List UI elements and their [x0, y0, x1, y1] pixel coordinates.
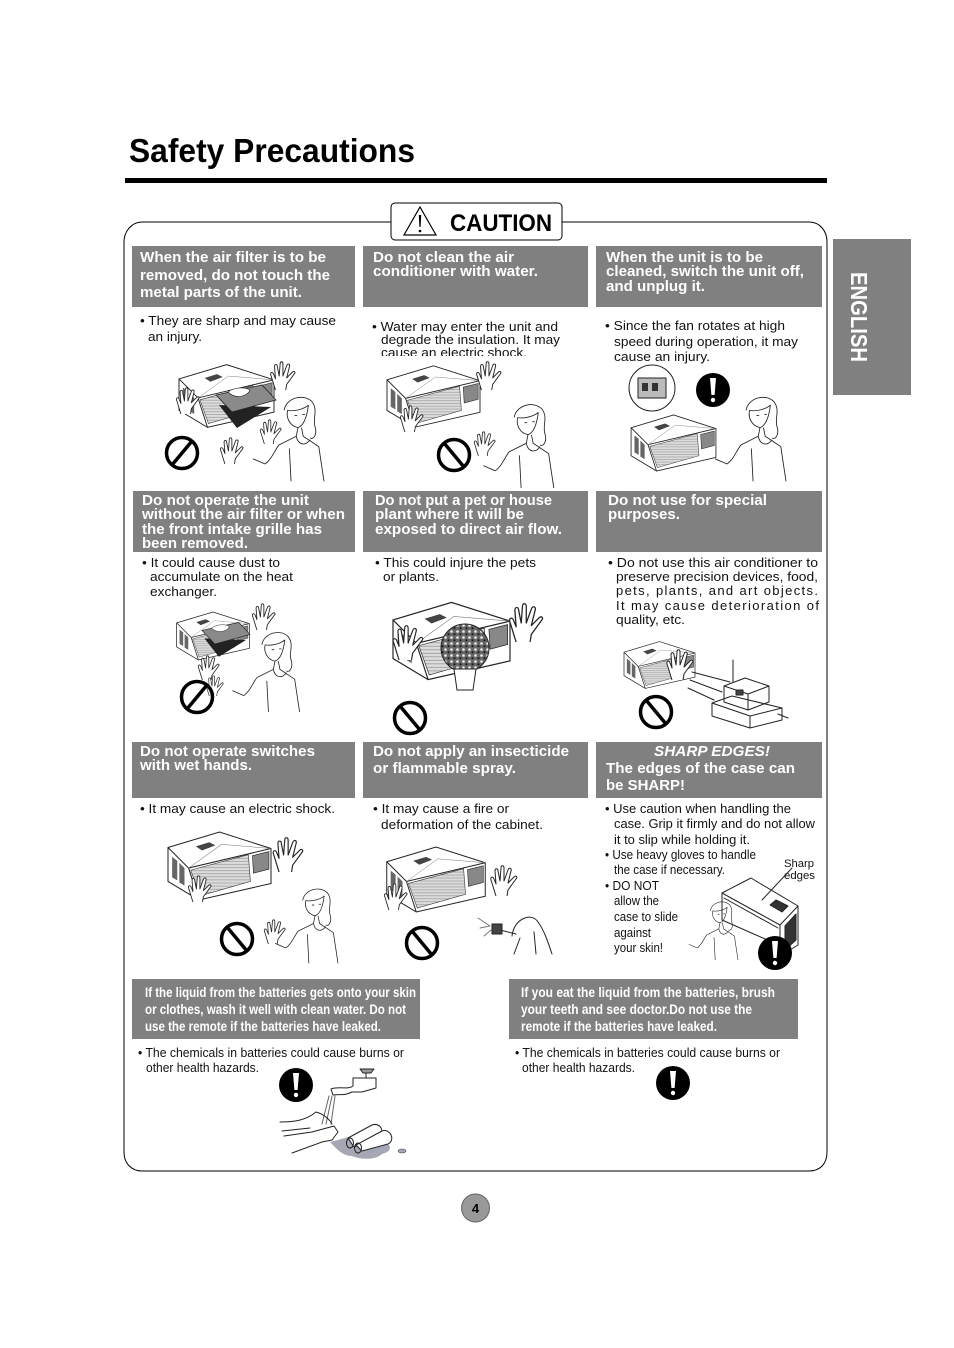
icon: mandatory	[279, 1068, 313, 1102]
text: handling: case to slide	[614, 909, 678, 924]
text: handling: • Use caution when handling the	[605, 801, 791, 816]
page number: 4	[472, 1201, 480, 1216]
text: preservation: It may cause deterioration of	[616, 598, 819, 613]
icon: prohibited	[182, 682, 212, 712]
heading: sharp edges: The edges of the case can	[606, 761, 795, 777]
title rule	[125, 178, 827, 183]
text: fan: speed during operation, it may	[614, 334, 799, 349]
heading: batteries eaten: remote if the batteries have leaked.	[521, 1018, 717, 1034]
text: fire	[373, 801, 543, 832]
language tab	[833, 239, 911, 395]
heading: do not clean with water: Do not clean the air	[373, 250, 514, 266]
heading: batteries eaten	[509, 979, 798, 1039]
heading: no operation without filter: been removed.	[142, 536, 248, 552]
text: pets: or plants.	[383, 569, 439, 584]
heading: no operation without filter: without the air filter or when	[141, 507, 345, 523]
icon: prohibited	[394, 702, 426, 734]
text: pets: • This could injure the pets	[375, 555, 537, 570]
text: handling: your skin!	[614, 940, 663, 955]
text: handling: case. Grip it firmly and do not allow	[614, 816, 816, 831]
text: chemicals right: • The chemicals in batteries could cause burns or	[515, 1045, 781, 1060]
heading: do not clean with water	[363, 246, 588, 307]
heading: special purposes: purposes.	[608, 507, 680, 523]
person with spray	[478, 917, 552, 954]
text: preservation: preserve precision devices, food,	[616, 569, 818, 584]
heading: batteries eaten: your teeth and see doctor.Do not use the	[521, 1001, 752, 1017]
icon: mandatory	[656, 1066, 690, 1100]
text: sharp parts: • They are sharp and may cause	[140, 313, 336, 328]
text: handling: allow the	[614, 893, 659, 908]
icon: prohibited	[406, 928, 438, 958]
illustration: handling the case	[689, 868, 798, 970]
batteries	[346, 1124, 392, 1153]
text: fire: • It may cause a fire or	[373, 801, 510, 816]
heading: switch off and unplug: cleaned, switch the unit off,	[606, 264, 804, 280]
text: handling: against	[614, 925, 651, 940]
heading: no operation without filter: the front intake grille has	[142, 522, 322, 538]
text: fan: cause an injury.	[614, 349, 710, 364]
caution badge: CAUTION	[450, 210, 552, 237]
text: fire: deformation of the cabinet.	[381, 817, 543, 832]
text: preservation	[608, 555, 819, 627]
illustration: filter removed	[177, 604, 300, 712]
heading: no operation without filter	[133, 491, 355, 552]
icon: outlet callout	[629, 365, 675, 411]
heading: switch off and unplug: and unplug it.	[606, 279, 705, 295]
label: sharp edges: edges	[784, 870, 816, 882]
text: fan	[605, 318, 799, 364]
text: chemicals right: other health hazards.	[522, 1060, 635, 1075]
heading: sharp edges: SHARP EDGES!	[654, 744, 770, 760]
text: electric shock: • It may cause an electric shock.	[140, 801, 335, 816]
heading: air filter metal parts: When the air filter is to be	[140, 250, 326, 266]
heading: insecticide	[363, 742, 588, 798]
heading: special purposes	[596, 491, 822, 552]
panel frame	[124, 222, 827, 1171]
heading: wet hands: with wet hands.	[139, 758, 252, 774]
heading: wet hands	[132, 742, 355, 798]
hands	[280, 1112, 338, 1153]
illustration: removing air filter	[166, 362, 324, 481]
text: sharp parts	[140, 313, 336, 344]
text: water	[372, 319, 561, 362]
case	[722, 868, 798, 950]
heading: batteries on skin: If the liquid from the batteries gets onto your skin	[145, 984, 416, 1000]
text: preservation: • Do not use this air conditioner to	[608, 555, 818, 570]
text: water: degrade the insulation. It may	[381, 332, 561, 347]
heading: special purposes: Do not use for special	[608, 493, 767, 509]
heading: batteries on skin	[132, 979, 420, 1039]
text: handling: • Use heavy gloves to handle	[605, 847, 756, 862]
illustration: precision devices	[624, 642, 788, 728]
text: chemicals right	[515, 1045, 781, 1075]
page number	[462, 1194, 490, 1222]
icon: prohibited	[222, 924, 252, 954]
icon: prohibited	[438, 440, 470, 470]
icon: mandatory	[758, 936, 792, 970]
faucet	[322, 1069, 376, 1124]
text: water: cause an electric shock.	[381, 345, 527, 360]
text: handling: • DO NOT	[605, 878, 659, 893]
label: sharp edges	[784, 858, 816, 882]
icon: prohibited	[166, 438, 198, 468]
illustration: unplug	[629, 365, 786, 481]
illustration: wet hands	[168, 832, 338, 963]
heading: air filter metal parts: removed, do not touch the	[140, 268, 330, 284]
text: chemicals left: • The chemicals in batteries could cause burns or	[138, 1045, 405, 1060]
icon: mandatory	[696, 373, 730, 407]
text: handling: the case if necessary.	[614, 862, 725, 877]
heading: pets and plants: exposed to direct air flow.	[375, 522, 562, 538]
text: sharp parts: an injury.	[148, 329, 202, 344]
text: preservation: pets, plants, and art objects.	[616, 583, 818, 598]
heading: batteries on skin: use the remote if the batteries have leaked.	[145, 1018, 381, 1034]
text: water: • Water may enter the unit and	[372, 319, 558, 334]
heading: pets and plants: plant where it will be	[375, 507, 524, 523]
text: dust	[142, 555, 293, 599]
caution badge	[391, 203, 562, 240]
heading: sharp edges: be SHARP!	[606, 778, 685, 794]
heading: wet hands: Do not operate switches	[140, 744, 315, 760]
text: dust: exchanger.	[150, 584, 217, 599]
text: dust: accumulate on the heat	[150, 569, 293, 584]
heading: pets and plants	[363, 491, 588, 552]
text: fan: • Since the fan rotates at high	[605, 318, 785, 333]
illustration: washing batteries	[279, 1068, 406, 1159]
heading: batteries eaten: If you eat the liquid from the batteries, brush	[521, 984, 775, 1000]
heading: do not clean with water: conditioner with water.	[373, 264, 538, 280]
text: dust: • It could cause dust to	[142, 555, 280, 570]
spill	[330, 1135, 390, 1159]
heading: switch off and unplug: When the unit is to be	[606, 250, 763, 266]
illustration: plant in airflow	[393, 602, 543, 734]
heading: no operation without filter: Do not operate the unit	[142, 493, 309, 509]
illustration: insecticide	[384, 847, 552, 958]
icon: prohibited	[640, 696, 672, 728]
heading: batteries on skin: or clothes, wash it well with clean water. Do not	[145, 1001, 406, 1017]
label: sharp edges: Sharp	[784, 858, 814, 870]
text: chemicals left: other health hazards.	[146, 1060, 259, 1075]
heading: air filter metal parts	[132, 246, 355, 307]
text: handling: it to slip while holding it.	[614, 832, 750, 847]
plant	[441, 624, 489, 690]
text: chemicals left	[138, 1045, 405, 1075]
title: Safety Precautions	[129, 132, 415, 169]
heading: air filter metal parts: metal parts of the unit.	[140, 285, 302, 301]
heading: insecticide: Do not apply an insecticide	[373, 744, 569, 760]
text: pets	[375, 555, 537, 584]
illustration: no water	[387, 362, 554, 488]
heading: switch off and unplug	[596, 246, 822, 307]
language tab: ENGLISH	[846, 272, 872, 362]
text: handling	[605, 801, 816, 955]
text: preservation: quality, etc.	[616, 612, 685, 627]
heading: insecticide: or flammable spray.	[373, 761, 516, 777]
heading: pets and plants: Do not put a pet or house	[375, 493, 552, 509]
storage boxes	[712, 678, 788, 728]
heading: sharp edges	[596, 742, 822, 798]
